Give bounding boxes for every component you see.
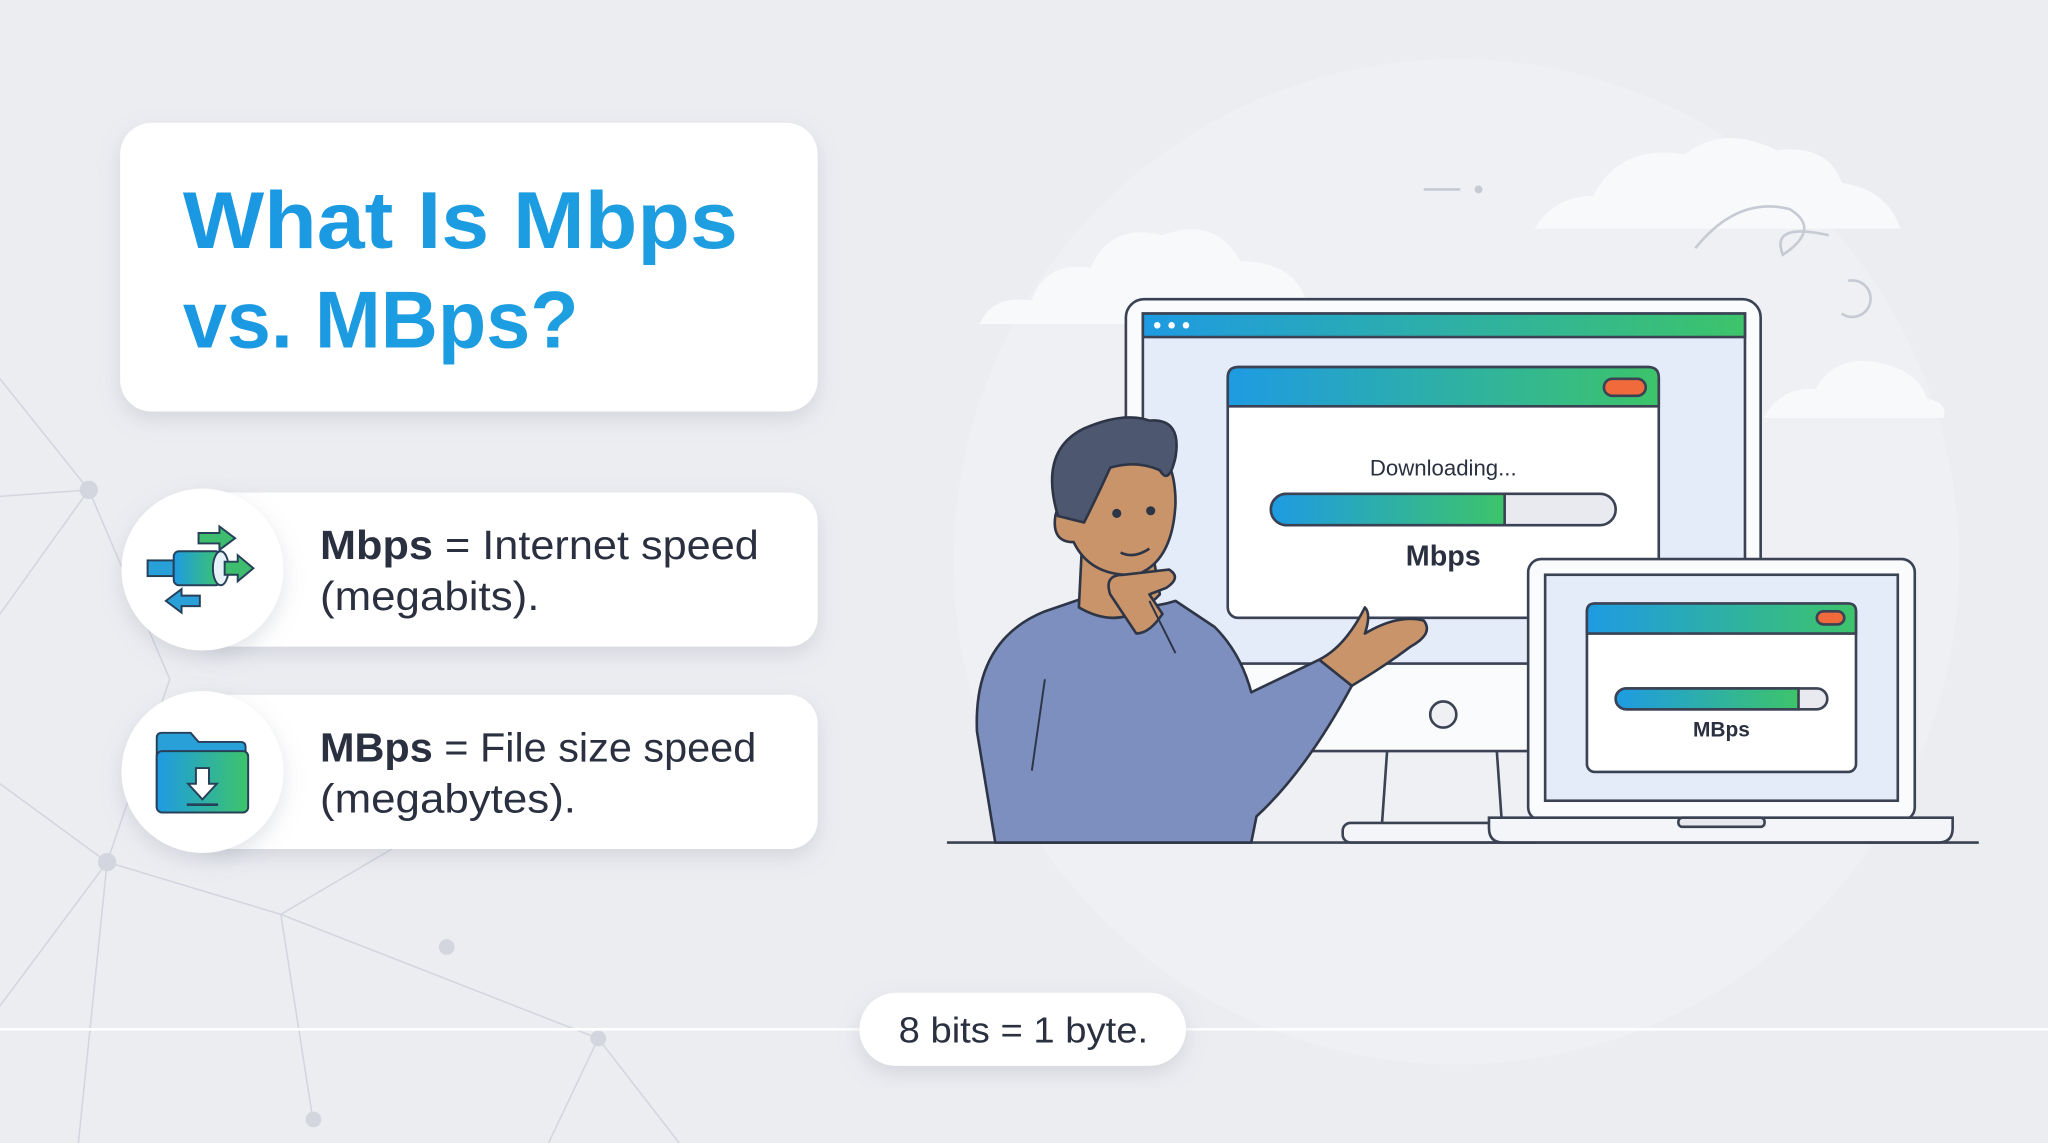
open hand [1319, 607, 1427, 686]
ground line [947, 842, 1979, 844]
title: What Is Mbps [183, 176, 738, 266]
card: MBps [121, 691, 818, 853]
text: Mbps definition: Mbps = Internet speed [320, 522, 759, 568]
title card [120, 123, 818, 412]
callout: 8 bits = 1 byte: 8 bits = 1 byte. [899, 1009, 1148, 1050]
clouds [980, 138, 1945, 418]
dialog: MBps [1587, 604, 1856, 772]
text: MBps definition: MBps = File size speed [320, 725, 756, 771]
dialog: downloading [1228, 367, 1659, 618]
body with sleeve [977, 594, 1352, 843]
person [977, 417, 1427, 843]
neck [1079, 549, 1160, 618]
laptop [1489, 559, 1953, 843]
monitor [1126, 299, 1761, 843]
card: MBps: (megabytes). [320, 775, 576, 821]
dialog: downloading: Downloading... [1370, 455, 1517, 480]
card: Mbps [121, 489, 818, 651]
background network lines [0, 379, 679, 1143]
icon: folder download [157, 733, 248, 812]
card: Mbps: (megabits). [320, 573, 539, 619]
head [1055, 434, 1176, 575]
icon: data transfer [148, 526, 253, 613]
title card: vs. MBps? [183, 275, 579, 365]
hand on chin [1109, 570, 1175, 634]
divider line [0, 1028, 2048, 1030]
callout: 8 bits = 1 byte [859, 993, 1186, 1066]
background blob [953, 59, 1959, 1065]
hair [1052, 417, 1177, 523]
dialog: MBps: MBps [1693, 719, 1750, 742]
dialog: downloading: Mbps [1406, 541, 1481, 573]
